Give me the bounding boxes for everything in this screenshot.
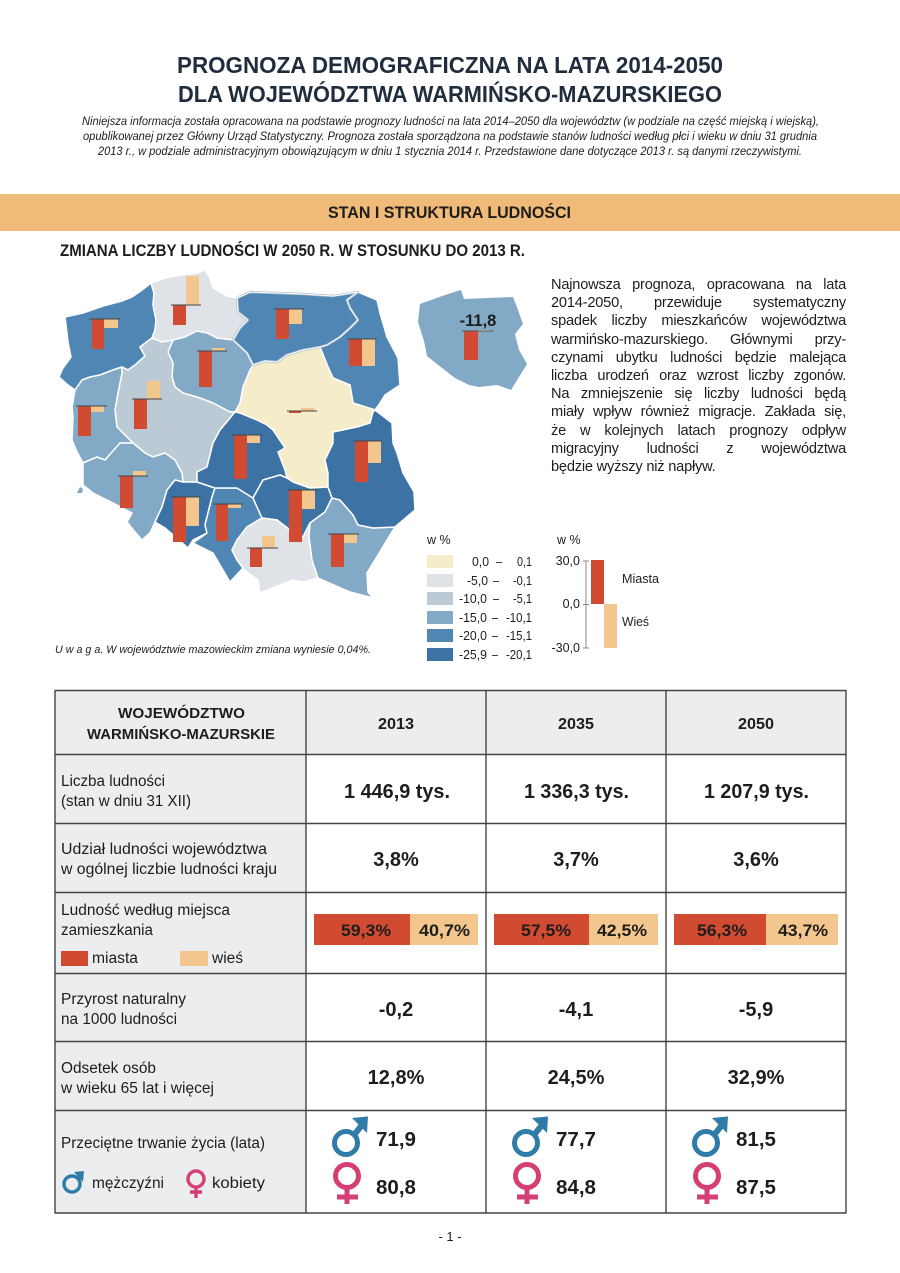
map colour legend: –: [493, 574, 499, 588]
region: opolskie: [155, 480, 215, 548]
row: natural increase: Przyrost naturalny: [61, 991, 186, 1008]
title: DLA WOJEWÓDZTWA WARMIŃSKO-MAZURSKIEGO: [178, 80, 722, 107]
table header: [87, 704, 774, 743]
row: life expectancy: kobiety: [212, 1175, 265, 1192]
table header: 2035: [558, 716, 594, 733]
row: natural increase: na 1000 ludności: [61, 1011, 177, 1028]
bar scale legend: 0,0: [563, 597, 580, 611]
body paragraph: 2014-2050, przewiduje systematyczny: [551, 295, 846, 311]
body paragraph: migracyjny ludności z województwa: [551, 441, 846, 457]
body paragraph: [551, 277, 846, 475]
map colour legend: -10,0: [459, 592, 487, 606]
table header: 2013: [378, 716, 414, 733]
map colour legend: –: [492, 611, 498, 625]
region: warminsko-mazurskie: [233, 292, 358, 365]
body paragraph: liczba urodzeń oraz wzrost liczby zgonów.: [551, 368, 846, 384]
icon: male: [334, 1116, 368, 1154]
table grid: [55, 690, 846, 1214]
life expectancy 2013: 80,8: [376, 1177, 416, 1199]
row: urban and rural population: zamieszkania: [61, 922, 153, 939]
map colour legend: -5,1: [513, 592, 532, 606]
region: kujawsko-pomorskie: [168, 331, 253, 412]
table header: WARMIŃSKO-MAZURSKIE: [87, 726, 275, 743]
row: share aged 65 and over: 24,5%: [548, 1067, 605, 1089]
bar scale legend: w %: [556, 533, 581, 547]
map colour legend: [426, 533, 532, 662]
title: PROGNOZA DEMOGRAFICZNA NA LATA 2014-2050: [177, 52, 723, 78]
region: pomorskie: [151, 270, 248, 342]
body paragraph: warmińsko-mazurskiego. Głównymi przy-: [551, 332, 846, 348]
region: dolnoslaskie: [83, 443, 183, 540]
icon: male: [514, 1116, 548, 1154]
row: natural increase: -4,1: [559, 999, 593, 1021]
map colour legend: –: [492, 629, 498, 643]
bar scale legend: -30,0: [552, 641, 580, 655]
data table: [55, 690, 846, 1214]
intro text: opublikowanej przez Główny Urząd Statystyczny. Prognoza została sporządzona na podstawie stanów ludności według płci i wieku w dniu 31 grudnia: [83, 131, 817, 143]
row: urban and rural population: 40,7%: [419, 921, 470, 940]
bar scale legend: Miasta: [622, 572, 659, 586]
map colour legend: w %: [426, 533, 451, 547]
map colour legend: -25,9: [459, 648, 487, 662]
row: urban and rural population: [61, 902, 838, 967]
life expectancy 2013: [334, 1116, 416, 1204]
body paragraph: Najnowsza prognoza, opracowana na lata: [551, 277, 846, 293]
row: share of national population: 3,8%: [373, 849, 419, 871]
row: share of national population: 3,6%: [733, 849, 779, 871]
body paragraph: czynami ubytku ludności będzie malejąca: [551, 350, 846, 366]
row: urban and rural population: wieś: [211, 950, 243, 967]
row: urban and rural population: 43,7%: [778, 921, 828, 940]
row: urban and rural population: 42,5%: [597, 921, 647, 940]
section band: [0, 194, 900, 231]
intro text: [82, 116, 819, 158]
row: natural increase: [61, 991, 773, 1028]
row: share aged 65 and over: 12,8%: [368, 1067, 425, 1089]
map colour legend: -15,0: [459, 611, 487, 625]
inset map: Poland total: [418, 290, 527, 390]
map colour legend: –: [496, 555, 502, 569]
table header: WOJEWÓDZTWO: [118, 704, 245, 722]
row: share of national population: [60, 841, 779, 878]
life expectancy 2050: [694, 1116, 776, 1204]
region: podlaskie: [320, 292, 400, 410]
life expectancy 2035: [514, 1116, 596, 1204]
region: zachodniopomorskie: [59, 283, 156, 390]
icon: male legend: [64, 1171, 84, 1192]
warminsko-mazurskie highlighted outline: [233, 292, 358, 365]
map colour legend: -15,1: [506, 629, 532, 643]
map colour legend: 0,0: [472, 555, 489, 569]
table header: 2050: [738, 716, 774, 733]
bar scale legend: 30,0: [556, 554, 580, 568]
row: life expectancy: Przeciętne trwanie życia (lata): [61, 1135, 265, 1152]
life expectancy 2050: 87,5: [736, 1177, 776, 1199]
row: natural increase: -5,9: [739, 999, 773, 1021]
bar scale legend: Wieś: [622, 615, 649, 629]
page number: - 1 -: [438, 1229, 462, 1244]
row: population: 1 446,9 tys.: [344, 781, 450, 803]
row: life expectancy: mężczyźni: [92, 1175, 164, 1192]
row: population: 1 336,3 tys.: [524, 781, 629, 803]
row: share aged 65 and over: w wieku 65 lat i więcej: [60, 1080, 214, 1097]
row: population: (stan w dniu 31 XII): [61, 793, 191, 810]
body paragraph: Na zmniejszenie się liczby ludności będą: [551, 386, 846, 402]
title: [177, 52, 723, 107]
life expectancy 2035: 77,7: [556, 1129, 596, 1151]
intro text: Niniejsza informacja została opracowana na podstawie prognozy ludności na lata 2014–2050 dla województw (w podziale na część miejską i wiejską),: [82, 116, 819, 128]
map colour legend: –: [492, 648, 498, 662]
life expectancy 2013: 71,9: [376, 1129, 416, 1151]
icon: male: [694, 1116, 728, 1154]
body paragraph: miały wpływ również migracje. Zakłada się,: [551, 404, 846, 420]
region: slaskie: [193, 488, 262, 582]
row: share of national population: 3,7%: [553, 849, 599, 871]
region: swietokrzyskie: [253, 475, 332, 537]
body paragraph: spadek liczby mieszkańców województwa: [551, 313, 846, 329]
icon: female: [696, 1164, 718, 1204]
row: urban and rural population: 57,5%: [521, 921, 571, 940]
row: share of national population: w ogólnej liczbie ludności kraju: [60, 861, 277, 878]
row: share aged 65 and over: [60, 1060, 785, 1097]
region: lubelskie: [325, 410, 415, 528]
map colour legend: -0,1: [513, 574, 532, 588]
row: population: [61, 773, 809, 810]
icon: female legend: [188, 1171, 204, 1198]
body paragraph: że w kolejnych latach prognozy odpływ: [551, 423, 846, 439]
map colour legend: -20,1: [506, 648, 532, 662]
row: share of national population: Udział ludności województwa: [61, 841, 267, 858]
row: urban and rural population: miasta: [92, 950, 138, 967]
row: urban and rural population: 59,3%: [341, 921, 391, 940]
subheading: ZMIANA LICZBY LUDNOŚCI W 2050 R. W STOSUNKU DO 2013 R.: [60, 241, 525, 260]
table label column background: [55, 690, 846, 1213]
row: urban and rural population: Ludność według miejsca: [61, 902, 230, 919]
row: share aged 65 and over: Odsetek osób: [61, 1060, 156, 1077]
row: urban and rural population: 56,3%: [697, 921, 747, 940]
region: dolnoslaskie tip: [77, 487, 83, 493]
map colour legend: -20,0: [459, 629, 487, 643]
row: natural increase: -0,2: [379, 999, 413, 1021]
inset map: Poland total: -11,8: [460, 312, 496, 330]
row: life expectancy: [61, 1116, 776, 1204]
map colour legend: -5,0: [467, 574, 488, 588]
region: podkarpackie: [309, 498, 395, 598]
body paragraph: będzie wyższy niż napływ.: [551, 459, 716, 475]
map colour legend: 0,1: [517, 555, 532, 569]
map colour legend: -10,1: [506, 611, 532, 625]
row: population: 1 207,9 tys.: [704, 781, 809, 803]
icon: female: [516, 1164, 538, 1204]
region: wielkopolskie: [115, 338, 235, 482]
map of Poland by voivodeship: [59, 270, 415, 598]
row: population: Liczba ludności: [61, 773, 165, 790]
bar scale legend: [552, 533, 659, 655]
map colour legend: –: [493, 592, 499, 606]
icon: female: [336, 1164, 358, 1204]
life expectancy 2050: 81,5: [736, 1129, 776, 1151]
note: U w a g a. W województwie mazowieckim zmiana wyniesie 0,04%.: [55, 644, 371, 656]
region: lubuskie: [72, 367, 133, 463]
region: mazowieckie: [235, 347, 375, 488]
section band: STAN I STRUKTURA LUDNOŚCI: [328, 203, 571, 222]
row: share aged 65 and over: 32,9%: [728, 1067, 785, 1089]
region: lodzkie: [197, 412, 287, 498]
bar charts on the map: [76, 276, 382, 567]
life expectancy 2035: 84,8: [556, 1177, 596, 1199]
region: malopolskie: [232, 518, 318, 593]
intro text: 2013 r., w podziale administracyjnym obowiązującym w dniu 1 stycznia 2014 r. Przedstawione dane dotyczące 2013 r. są danymi rzeczywistymi.: [97, 146, 802, 158]
